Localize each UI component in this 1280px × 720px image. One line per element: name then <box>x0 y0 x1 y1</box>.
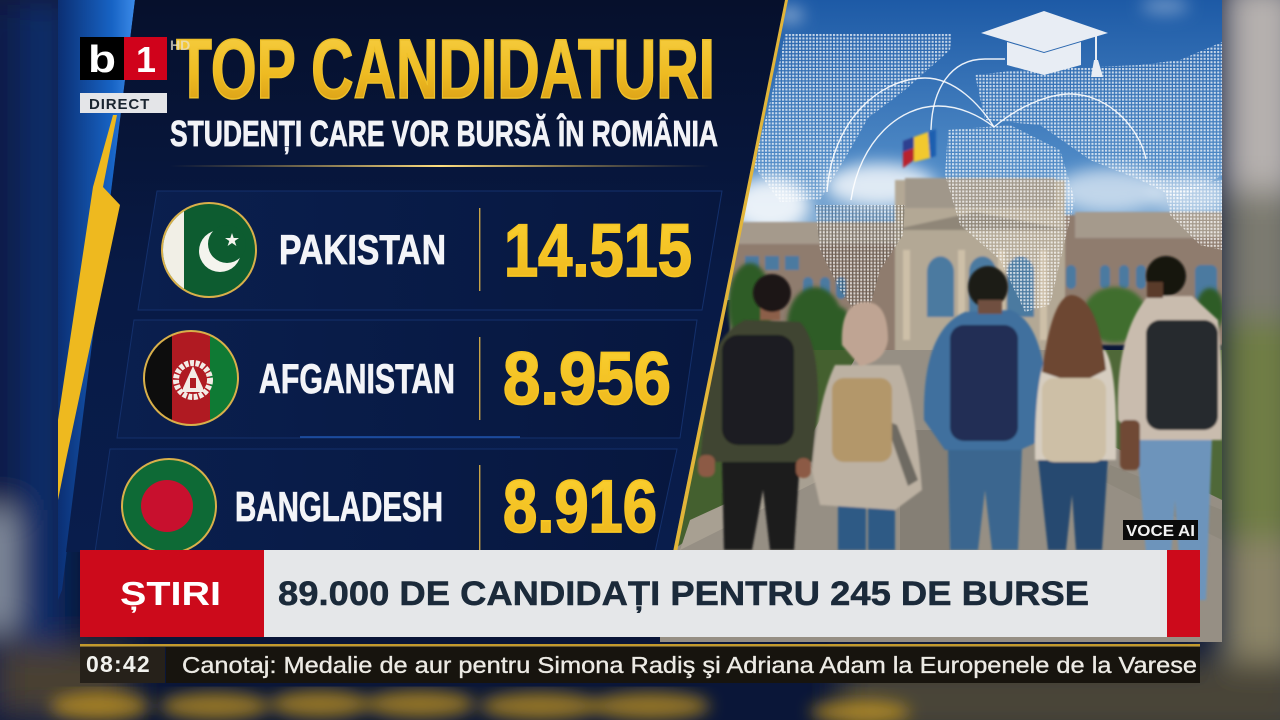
icon: flag of Afghanistan <box>140 330 242 430</box>
icon: flag of Bangladesh <box>121 458 217 550</box>
logo: B1 HD: HD <box>170 37 190 53</box>
student: hoodie <box>1118 256 1222 600</box>
icon: graduation cap <box>981 11 1108 77</box>
card: Pakistan <box>138 191 722 310</box>
gold divider line <box>170 165 710 167</box>
news ticker <box>80 644 1200 683</box>
label: Bangladesh: BANGLADESH <box>235 483 443 530</box>
headline text: 89.000 DE CANDIDAȚI PENTRU 245 DE BURSE <box>278 575 1089 613</box>
clock: 08:42 <box>86 651 151 677</box>
value: Pakistan: 14.515 <box>504 209 692 292</box>
ground <box>660 350 1222 642</box>
card: Afghanistan <box>117 320 697 438</box>
label: Pakistan: PAKISTAN <box>279 226 446 273</box>
heading: title: TOP CANDIDATURI <box>176 22 715 116</box>
ticker text: Canotaj: Medalie de aur pentru Simona Radiş şi Adriana Adam la Europenele de la Varese <box>182 652 1197 678</box>
card: Bangladesh <box>95 449 677 555</box>
label: Afghanistan: AFGANISTAN <box>259 355 455 402</box>
value: Bangladesh: 8.916 <box>503 465 657 548</box>
university building <box>730 178 1225 370</box>
label: stiri: ȘTIRI <box>120 575 221 613</box>
student: denim jacket <box>924 266 1046 550</box>
trees <box>728 263 1224 363</box>
heading: subtitle: STUDENȚI CARE VOR BURSĂ ÎN ROMÂNIA <box>170 112 718 154</box>
yellow accent strip <box>58 115 120 500</box>
route arcs <box>827 59 1146 200</box>
badge: direct: DIRECT <box>89 96 150 113</box>
dotted world map <box>753 33 1222 325</box>
icon: Romanian flag <box>903 129 936 168</box>
students group <box>698 256 1222 600</box>
student: long hair <box>1035 295 1116 550</box>
logo: B1 HD: 1 <box>136 39 156 80</box>
badge: direct <box>80 93 167 113</box>
logo: B1 HD: b <box>88 39 116 81</box>
badge: voce ai: VOCE AI <box>1126 523 1195 540</box>
student: green jacket <box>698 274 818 550</box>
logo: B1 HD <box>80 37 190 81</box>
lower third: news headline bar <box>80 550 1200 637</box>
panel: dark navy data panel <box>58 0 788 600</box>
clouds <box>730 0 1230 233</box>
value: Afghanistan: 8.956 <box>503 337 671 420</box>
icon: flag of Pakistan <box>160 200 260 300</box>
student: hijab <box>812 302 922 550</box>
sky <box>728 0 1222 300</box>
panel: campus photo <box>660 0 1230 642</box>
